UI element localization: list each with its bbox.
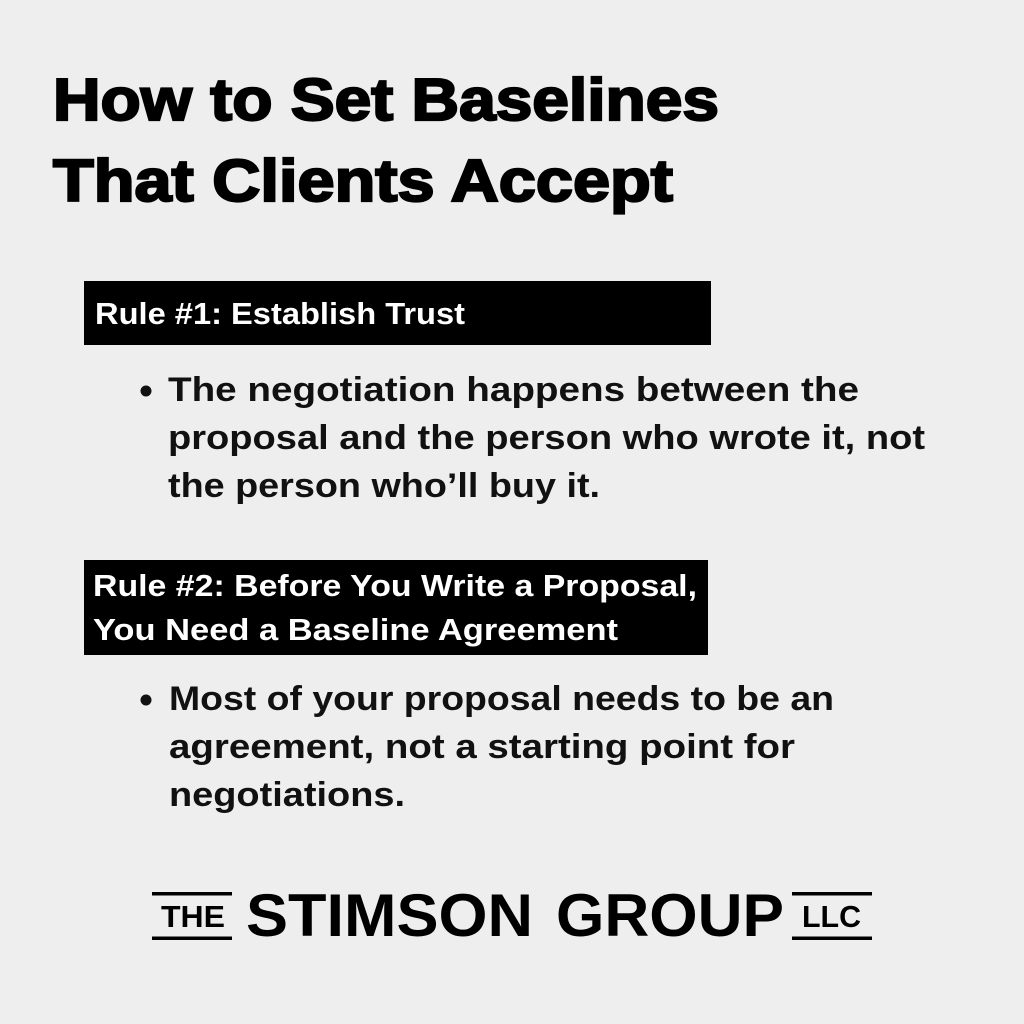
- logo: The Stimson Group LLC: GROUP: [556, 882, 784, 949]
- text block: rule 1 bullet: the person who’ll buy it.: [168, 467, 600, 505]
- text block: rule 1 bullet: [140, 371, 925, 505]
- title: [53, 67, 719, 214]
- logo: The Stimson Group LLC: THE: [161, 899, 225, 934]
- title: That Clients Accept: [53, 148, 673, 214]
- panel: rule 2 heading: Rule #2: Before You Write a Proposal,: [93, 568, 697, 603]
- logo: The Stimson Group LLC: STIMSON: [246, 882, 533, 949]
- panel: rule 2 heading: [84, 560, 708, 655]
- text block: rule 1 bullet: The negotiation happens between the: [168, 371, 859, 409]
- text block: rule 2 bullet: Most of your proposal needs to be an: [169, 680, 834, 718]
- text block: rule 1 bullet: proposal and the person who wrote it, not: [168, 419, 925, 457]
- logo: The Stimson Group LLC: [152, 882, 872, 949]
- panel: rule 1 heading: [84, 281, 711, 345]
- panel: rule 1 heading: Rule #1: Establish Trust: [95, 296, 465, 331]
- text block: rule 2 bullet: [140, 680, 834, 814]
- title: How to Set Baselines: [53, 67, 719, 133]
- text block: rule 2 bullet: negotiations.: [169, 776, 405, 814]
- text block: rule 2 bullet: agreement, not a starting point for: [169, 728, 795, 766]
- logo: The Stimson Group LLC: LLC: [802, 899, 861, 934]
- panel: rule 2 heading: You Need a Baseline Agreement: [93, 612, 618, 647]
